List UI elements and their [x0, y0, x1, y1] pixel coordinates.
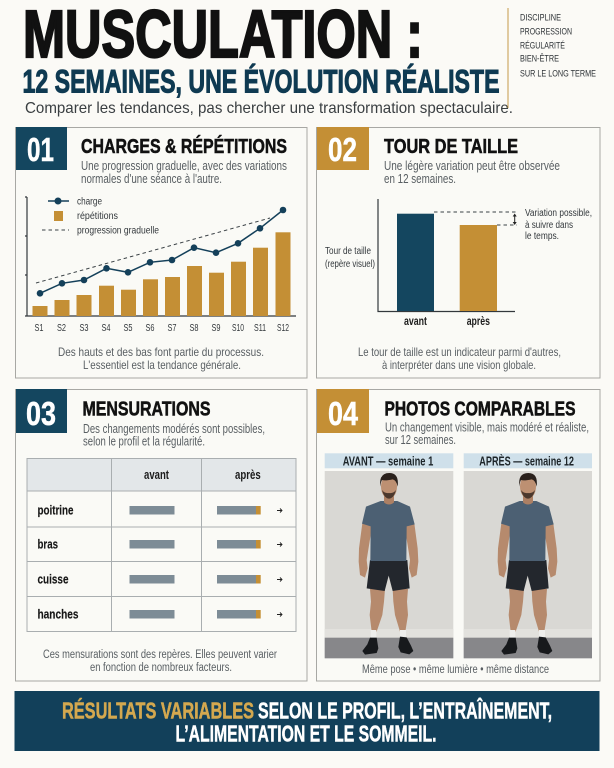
combo chart — [25, 197, 296, 334]
caption — [43, 649, 277, 674]
heading: MENSURATIONS — [82, 398, 210, 420]
panel: tour de taille — [316, 127, 600, 378]
footer banner: RÉSULTATS VARIABLES — [62, 696, 254, 724]
caption: Ces mensurations sont des repères. Elles peuvent varier — [43, 649, 277, 661]
row: hanches: hanches — [38, 606, 78, 622]
tagline: Comparer les tendances, pas chercher une transformation spectaculaire. — [25, 100, 513, 117]
bar chart: après — [467, 314, 490, 328]
heading: CHARGES & RÉPÉTITIONS — [81, 135, 287, 158]
combo chart: S10 — [232, 323, 244, 334]
footer banner: L’ALIMENTATION ET LE SOMMEIL. — [176, 720, 436, 746]
combo chart: S8 — [190, 323, 199, 334]
description: normales d'une séance à l'autre. — [81, 172, 222, 186]
caption — [358, 345, 561, 372]
panel: photos comparables — [316, 389, 600, 681]
combo chart: S3 — [80, 323, 89, 334]
description — [83, 422, 265, 448]
caption — [58, 345, 264, 372]
description: selon le profil et la régularité. — [83, 434, 205, 448]
row: poitrine: poitrine — [38, 502, 74, 518]
caption: Des hauts et des bas font partie du processus. — [58, 345, 264, 359]
keywords list — [508, 8, 596, 108]
description: Une légère variation peut être observée — [384, 159, 560, 173]
table: après — [235, 467, 261, 482]
table — [27, 458, 296, 632]
row: hanches — [38, 606, 282, 622]
combo chart: S4 — [102, 323, 111, 334]
heading: TOUR DE TAILLE — [384, 136, 518, 158]
man figure — [498, 473, 557, 655]
combo chart: S7 — [168, 323, 177, 334]
caption: Même pose • même lumière • même distance — [362, 662, 549, 676]
axis label: Tour de taille — [325, 246, 371, 257]
description — [385, 420, 589, 447]
axis label — [325, 246, 375, 270]
description: en 12 semaines. — [384, 172, 456, 186]
variation note: à suivre dans — [525, 220, 573, 231]
badge 04: 04 — [328, 395, 359, 432]
row: bras: bras — [38, 536, 58, 552]
keywords list: DISCIPLINE — [520, 12, 561, 24]
row: poitrine — [38, 502, 282, 518]
bar chart: avant — [404, 314, 427, 328]
combo chart: S9 — [212, 323, 221, 334]
combo chart: S1 — [34, 323, 44, 334]
variation note: le temps. — [525, 231, 559, 242]
man figure — [359, 473, 418, 655]
photo: avant — [325, 453, 453, 658]
badge 01 — [16, 127, 67, 170]
table: avant — [144, 467, 169, 482]
keywords list: RÉGULARITÉ — [520, 40, 565, 52]
description — [81, 159, 287, 186]
badge 03: 03 — [26, 395, 56, 432]
keywords list: PROGRESSION — [520, 26, 572, 38]
panel: mensurations — [16, 389, 307, 681]
photo: avant: AVANT — semaine 1 — [343, 454, 433, 468]
badge 02 — [317, 127, 369, 170]
combo chart: S12 — [277, 323, 289, 334]
combo chart: S11 — [254, 323, 266, 334]
legend: charge — [77, 196, 102, 208]
photo: après — [464, 453, 592, 658]
caption: en fonction de nombreux facteurs. — [90, 662, 232, 674]
footer banner — [14, 691, 600, 751]
panel: charges et répétitions — [16, 127, 307, 378]
legend: répétitions — [77, 211, 118, 222]
description: Une progression graduelle, avec des variations — [81, 159, 287, 173]
caption: L'essentiel est la tendance générale. — [83, 358, 241, 372]
bar chart — [378, 199, 517, 328]
keywords list: BIEN-ÊTRE — [520, 54, 559, 64]
row: cuisse — [38, 572, 282, 586]
combo chart: S5 — [124, 323, 133, 334]
photo: après: APRÈS — semaine 12 — [479, 454, 574, 468]
badge 03 — [16, 389, 67, 433]
axis label: (repère visuel) — [325, 259, 375, 270]
variation note: Variation possible, — [525, 208, 592, 219]
caption: Le tour de taille est un indicateur parmi d'autres, — [358, 345, 561, 359]
legend — [42, 196, 159, 236]
badge 04 — [317, 389, 369, 433]
description: Des changements modérés sont possibles, — [83, 422, 265, 436]
row: cuisse: cuisse — [38, 572, 68, 586]
badge 02: 02 — [328, 131, 357, 168]
description: sur 12 semaines. — [385, 433, 456, 447]
variation note — [525, 208, 592, 242]
combo chart: S2 — [57, 323, 66, 334]
legend: progression graduelle — [77, 226, 159, 236]
row: bras — [38, 536, 282, 552]
caption: à interpréter dans une vision globale. — [382, 358, 536, 372]
badge 01: 01 — [27, 131, 54, 168]
description — [384, 159, 560, 186]
combo chart: S6 — [146, 323, 155, 334]
